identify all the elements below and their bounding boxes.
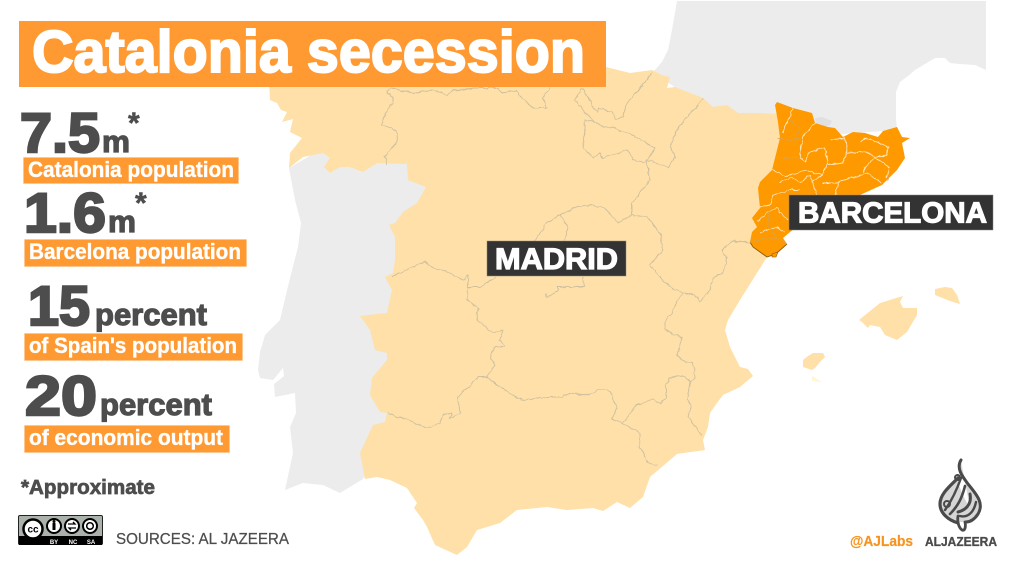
icon: Al Jazeera calligraphic logo <box>940 460 981 530</box>
map: France <box>653 1 986 135</box>
icon: Creative Commons BY-NC-SA badge: SA <box>87 540 96 546</box>
stat: 7.5m Catalonia population: 7.5 <box>20 101 100 164</box>
title banner: Catalonia secession <box>32 19 585 85</box>
map: Spain <box>269 60 790 555</box>
icon: Creative Commons BY-NC-SA badge <box>18 516 102 546</box>
icon: Creative Commons BY-NC-SA badge: BY <box>50 540 58 546</box>
Catalonia: comarca borders <box>758 108 890 233</box>
stat: 15 percent of Spain's population: 15 <box>28 274 90 337</box>
stat: 15 percent of Spain's population <box>24 274 242 360</box>
map: Spanish regional borders <box>382 73 750 466</box>
stat: 1.6m Barcelona population: m <box>108 204 136 239</box>
stat: 1.6m Barcelona population: 1.6 <box>24 181 106 244</box>
Catalonia: dark southern coastline <box>750 242 787 257</box>
map: Formentera <box>812 376 822 382</box>
Catalonia: coastal island <box>772 252 778 257</box>
stat: 20 percent of economic output: 20 <box>25 364 97 427</box>
stat: 1.6m Barcelona population: Barcelona population <box>29 239 241 264</box>
label: Madrid: MADRID <box>495 243 618 276</box>
icon: Creative Commons BY-NC-SA badge: NC <box>69 540 78 546</box>
icon: Creative Commons BY-NC-SA badge: cc <box>27 524 39 536</box>
Catalonia: inner tan borders <box>750 120 890 244</box>
stat: 20 percent of economic output: of economic output <box>29 425 224 450</box>
stat: 15 percent of Spain's population: percent <box>95 297 207 332</box>
stat: 7.5m Catalonia population: Catalonia population <box>28 157 234 182</box>
stat: 7.5m Catalonia population: m <box>102 124 130 159</box>
stat: 1.6m Barcelona population <box>24 181 246 266</box>
stat: 1.6m Barcelona population: * <box>135 187 147 220</box>
footnote: approximate: *Approximate <box>21 477 155 499</box>
credit: AJLabs: @AJLabs <box>850 534 913 550</box>
map: Andorra <box>815 117 832 130</box>
map: Ibiza <box>803 353 825 370</box>
map of Spain and neighbours <box>258 1 986 555</box>
stat: 20 percent of economic output <box>24 364 230 452</box>
map: Majorca <box>859 296 917 340</box>
map: Catalonia region <box>750 102 910 257</box>
map: Portugal <box>258 150 435 493</box>
stat: 15 percent of Spain's population: of Spain's population <box>29 333 237 358</box>
stat: 7.5m Catalonia population: * <box>128 107 140 140</box>
map: Menorca <box>935 287 960 304</box>
wordmark: AlJazeera: ALJAZEERA <box>925 534 998 549</box>
source line: SOURCES: AL JAZEERA <box>116 531 289 548</box>
stat: 7.5m Catalonia population <box>20 101 238 184</box>
label: Barcelona: BARCELONA <box>798 198 987 230</box>
stat: 20 percent of economic output: percent <box>100 387 212 422</box>
